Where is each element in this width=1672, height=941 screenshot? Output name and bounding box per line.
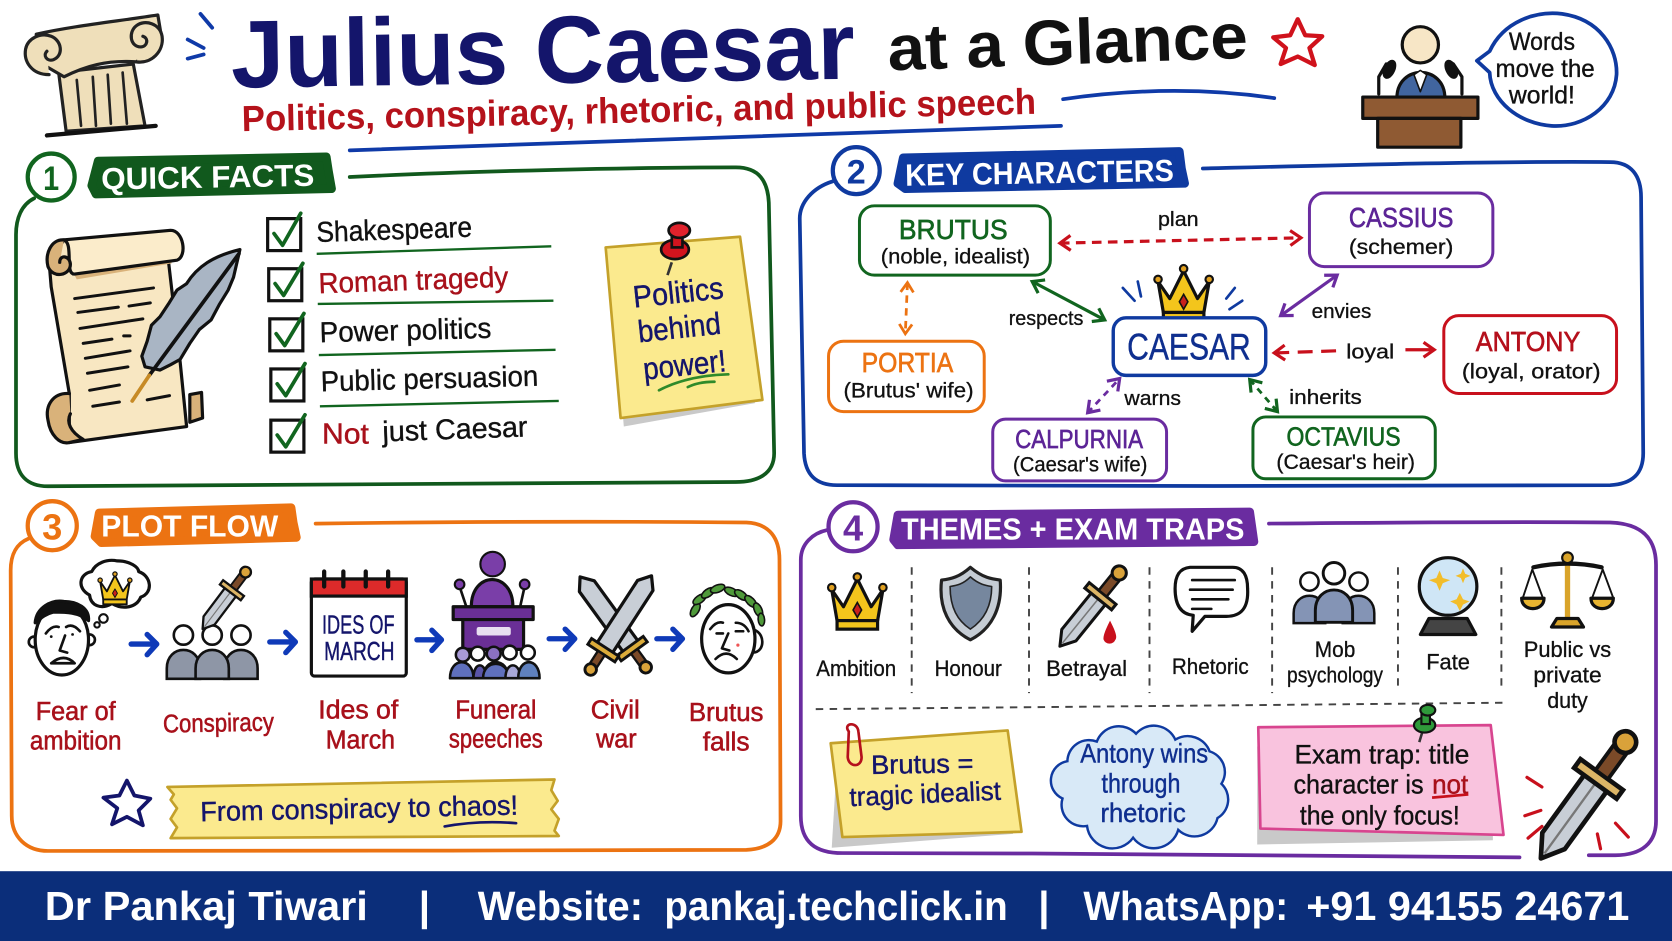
label: fate: Fate [1426,650,1470,675]
speech bubble [1477,13,1617,126]
sticky note: politics behind power [606,223,762,427]
label: mob psychology [1287,637,1384,687]
arrow: plan [1060,209,1301,243]
icon: ambition crown [828,573,887,629]
arrow: flow 1 [131,634,157,655]
icon: honour shield [941,567,1000,640]
checklist [268,212,559,452]
arrow: envies: envies [1312,301,1371,323]
step labels: Funeral [455,697,536,725]
item roman tragedy [269,262,553,304]
label: rhetoric: Rhetoric [1172,654,1249,679]
arrow: warns [1088,379,1181,413]
cloud: antony wins through rhetoric: rhetoric [1100,798,1186,828]
card: portia: PORTIA [862,347,954,378]
arrow: flow 3 [417,630,441,650]
panel 4 border [801,522,1656,857]
decorative accent ticks [188,14,212,59]
icon: paper clip [847,724,862,765]
label: public vs private duty [1524,637,1611,713]
heading quick facts: QUICK FACTS [101,158,315,197]
label: public vs private duty: Public vs [1524,637,1611,662]
panel 2 border [800,162,1643,486]
footer bar: pankaj.techclick.in [664,883,1008,929]
icon: crown above caesar [1154,265,1213,321]
arrow: respects: respects [1009,308,1083,330]
step labels: ambition [30,728,122,756]
card: octavius: OCTAVIUS [1287,424,1401,452]
panel 2: key characters [800,147,1643,486]
step labels: falls [703,729,750,757]
note: brutus tragic idealist [831,724,1022,848]
badge number 1 [28,154,75,200]
panel 4: themes and exam traps [801,502,1656,874]
footer bar: | [1038,883,1050,929]
title underline [350,91,1274,150]
panel 1 border [16,167,774,486]
footer bar: | [419,883,430,929]
card: calpurnia: CALPURNIA [1015,426,1144,454]
card: antony: (loyal, orator) [1462,360,1601,384]
icon: green pin [1414,705,1435,742]
speech bubble: world! [1508,82,1575,109]
icon: betrayal dagger [1047,557,1137,657]
icon: ides of march calendar [311,572,406,676]
icon: worried face with thought [29,560,149,675]
icon: orator at lectern [1363,27,1478,147]
icon: crossed swords [567,567,665,683]
cloud: antony wins through rhetoric [1051,726,1228,848]
item shakespeare: Shakespeare [316,212,473,249]
item shakespeare [268,212,551,254]
heading key characters: KEY CHARACTERS [905,153,1174,193]
icon: large dagger with motion marks [1520,718,1653,874]
item power politics: Power politics [319,313,492,349]
note: exam trap: Exam trap: title [1295,739,1469,769]
arrow: brutus portia [905,283,907,334]
icon: rhetoric speech bubble [1175,567,1248,631]
card: calpurnia [993,419,1167,481]
note: exam trap: the only focus! [1300,800,1460,830]
item not just caesar: just Caesar [381,411,528,448]
arrow: loyal: loyal [1346,341,1394,363]
arrow: flow 5 [657,629,682,649]
badge number 1: 1 [43,160,59,198]
card: caesar: CAESAR [1127,325,1251,367]
card: octavius: (Caesar's heir) [1276,450,1415,474]
footer bar: Website: [478,883,643,929]
icon: red pin [661,223,690,275]
cloud: antony wins through rhetoric: Antony wins [1080,738,1208,768]
label: public vs private duty: duty [1547,688,1589,713]
badge number 2 [833,147,880,194]
icon: funeral speech [450,552,540,678]
badge number 4: 4 [843,508,863,549]
heading themes and exam traps: THEMES + EXAM TRAPS [901,512,1244,547]
note: exam trap: not [1432,769,1469,799]
icon: sad head with laurel [688,583,765,673]
item public persuasion [271,361,559,406]
card: antony: ANTONY [1476,326,1580,357]
subtitle: Politics, conspiracy, rhetoric, and public speech [241,81,1036,139]
card: brutus: (noble, idealist) [881,244,1030,268]
step labels: Civil [591,697,640,725]
label: public vs private duty: private [1533,662,1602,687]
icon: ides of march calendar: MARCH [324,638,395,666]
dashed column dividers [816,567,1506,709]
title: at a Glance [886,0,1249,84]
step labels: March [326,727,395,755]
panel 1: quick facts [16,154,774,486]
label: ambition: Ambition [816,656,896,681]
icon: crown sparkles [1123,282,1242,309]
icon: fate crystal ball [1419,558,1477,634]
card: caesar [1113,318,1266,375]
icon: navy star [103,781,150,825]
label: mob psychology: psychology [1287,662,1384,687]
step labels [30,697,763,757]
arrow: plan: plan [1158,209,1199,231]
note: brutus tragic idealist: tragic idealist [849,776,1002,812]
card: portia: (Brutus' wife) [843,379,974,403]
speech bubble: move the [1496,56,1595,83]
icon: red star [1273,19,1322,65]
footer bar: WhatsApp: [1083,883,1288,929]
cloud: antony wins through rhetoric: through [1102,768,1180,798]
footer bar: +91 94155 24671 [1306,883,1629,929]
card: cassius: CASSIUS [1349,202,1453,233]
sticky note: politics behind power: power! [641,343,728,387]
card: brutus: BRUTUS [899,214,1008,245]
arrow: flow 2 [270,632,295,653]
note: exam trap: character is [1293,769,1424,799]
label: honour: Honour [935,656,1002,681]
step labels: Fear of [36,698,117,726]
panel 3: plot flow [11,501,781,851]
arrow: inherits: inherits [1289,387,1362,409]
card: antony [1444,316,1617,393]
icon: mob people [1294,562,1374,623]
card: octavius [1253,417,1435,479]
note: exam trap [1257,705,1504,845]
step labels: speeches [449,726,543,754]
speech bubble: Words [1509,29,1575,56]
footer bar [0,871,1672,941]
icon: scales [1522,552,1613,627]
badge number 4 [829,502,878,551]
panel 3 border [11,522,781,851]
item public persuasion: Public persuasion [320,361,539,398]
note: brutus tragic idealist: Brutus = [871,748,974,780]
icon: conspirators with dagger [167,560,259,679]
item not just caesar [271,411,528,452]
item power politics [270,313,556,355]
icon: scroll and quill [47,230,240,443]
card: portia [829,341,984,412]
card: cassius: (schemer) [1349,235,1453,259]
label: betrayal: Betrayal [1046,656,1127,681]
icon: ides of march calendar: IDES OF [322,611,395,639]
step labels: Conspiracy [163,709,274,738]
badge number 3: 3 [42,507,62,548]
card: calpurnia: (Caesar's wife) [1013,452,1147,476]
footer bar: Dr Pankaj Tiwari [45,883,368,929]
banner: from conspiracy to chaos: From conspiracy to chaos! [200,790,518,827]
card: brutus [859,206,1050,275]
sticky note: politics behind power: behind [636,306,722,349]
arrow: flow 4 [549,629,575,649]
step labels: war [595,726,637,754]
banner: from conspiracy to chaos [167,779,559,838]
arrow: inherits [1250,380,1362,412]
label: mob psychology: Mob [1315,637,1355,662]
arrow: respects [1009,282,1105,330]
icon: ionic column [25,15,162,135]
card: cassius [1309,193,1493,267]
arrow: envies [1281,275,1371,323]
step labels: Brutus [689,699,763,727]
item roman tragedy: Roman tragedy [318,262,509,300]
title [230,0,1249,108]
step labels: Ides of [318,697,399,725]
arrow: warns: warns [1123,388,1181,410]
badge number 3 [28,501,77,550]
item not just caesar: Not [322,419,369,451]
heading plot flow: PLOT FLOW [101,508,279,543]
sticky note: politics behind power: Politics [631,270,725,315]
badge number 2: 2 [847,153,866,191]
